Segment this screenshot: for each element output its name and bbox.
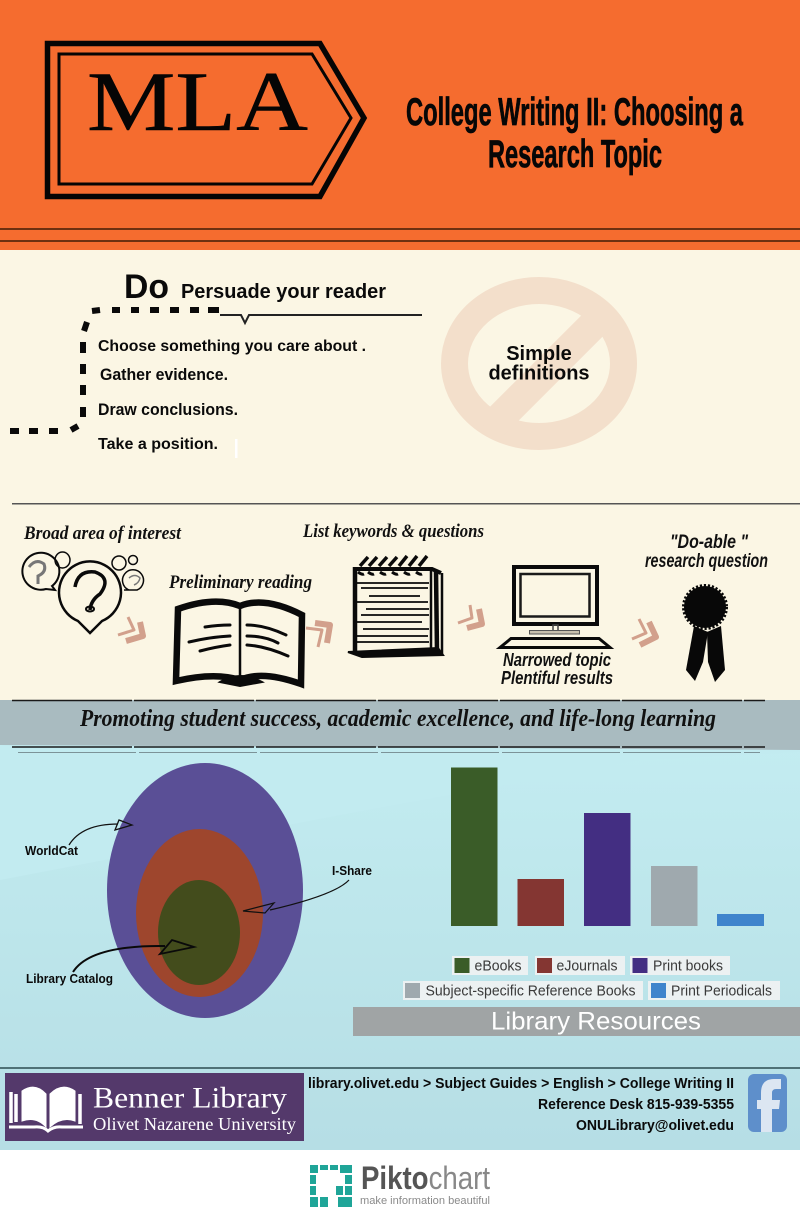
bar: Print books bbox=[584, 813, 630, 926]
icon: chevron 2 bbox=[306, 623, 330, 647]
legend: Print Periodicals bbox=[671, 984, 772, 1000]
text block: contact details: ONULibrary@olivet.edu bbox=[576, 1118, 734, 1134]
I-Share ellipse bbox=[136, 829, 263, 997]
label: do-able research question bbox=[645, 532, 768, 572]
icon: chevron 4 bbox=[632, 619, 656, 645]
icon: question bubbles bbox=[22, 552, 143, 633]
heading: library resources bbox=[353, 1007, 800, 1036]
Library Catalog ellipse bbox=[158, 880, 240, 985]
text block: do list: Choose something you care about . bbox=[98, 338, 366, 355]
text: Olivet Nazarene University: Olivet Nazarene University bbox=[93, 1114, 296, 1134]
banner: mission bbox=[0, 700, 800, 752]
text block: do list: Draw conclusions. bbox=[98, 400, 238, 419]
panel: footer white bbox=[0, 1150, 800, 1223]
icon: computer bbox=[500, 567, 610, 648]
label: do-able research question: "Do-able " bbox=[670, 532, 749, 553]
icon: open book bbox=[176, 602, 302, 686]
heading: library resources: Library Resources bbox=[491, 1008, 701, 1036]
WorldCat ellipse bbox=[107, 763, 303, 1018]
heading: MLA: MLA bbox=[87, 55, 308, 149]
panel: footer contact bbox=[5, 1073, 787, 1141]
arrow: Library Catalog bbox=[73, 940, 194, 972]
text: tagline: make information beautiful bbox=[360, 1195, 490, 1207]
icon: open book logo bbox=[9, 1087, 83, 1131]
legend: Print books bbox=[653, 958, 723, 974]
text: simple definitions: definitions bbox=[488, 362, 590, 384]
text: Benner Library: Benner Library bbox=[93, 1082, 287, 1114]
legend: eJournals bbox=[556, 958, 618, 974]
logo: Piktochart icon bbox=[310, 1165, 352, 1207]
text: simple definitions: Simple bbox=[506, 343, 572, 365]
text block: do list: Gather evidence. bbox=[100, 365, 228, 384]
label: narrowed topic, plentiful results: Plentiful results bbox=[501, 668, 613, 688]
panel: blue background bbox=[0, 745, 800, 1150]
text block: do list bbox=[98, 338, 366, 453]
text block: contact details: library.olivet.edu > Subject Guides > English > College Writing II bbox=[308, 1076, 734, 1092]
text: mission statement: Promoting student success, academic excellence, and life-long learning bbox=[79, 706, 716, 732]
speech line bbox=[220, 315, 422, 323]
legend: Subject-specific Reference Books bbox=[426, 984, 636, 1000]
label: Library Catalog: Library Catalog bbox=[26, 972, 113, 986]
text: Piktochart: Piktochart bbox=[361, 1160, 490, 1196]
title bbox=[406, 91, 743, 176]
heading: Do: Do bbox=[124, 268, 169, 306]
bar chart: library resources bbox=[451, 768, 764, 926]
legend bbox=[403, 956, 780, 1000]
text block: do list: Take a position. bbox=[98, 436, 218, 453]
text block: contact details bbox=[308, 1076, 734, 1134]
text: simple definitions bbox=[488, 343, 590, 384]
label: broad area of interest: Broad area of interest bbox=[23, 523, 182, 544]
legend: eBooks bbox=[474, 958, 522, 974]
label: WorldCat: WorldCat bbox=[25, 844, 79, 858]
bar: eBooks bbox=[451, 768, 498, 926]
icon: award ribbon bbox=[684, 586, 726, 682]
icon: MLA arrow tag bbox=[48, 44, 364, 196]
title: Research Topic bbox=[488, 133, 662, 176]
icon: prohibition sign bbox=[454, 290, 624, 448]
label: preliminary reading: Preliminary reading bbox=[168, 572, 312, 593]
bar: Print Periodicals bbox=[717, 914, 764, 926]
heading: persuade your reader: Persuade your reader bbox=[181, 281, 386, 303]
icon: chevron 1 bbox=[118, 617, 143, 641]
chart: nested ellipses bbox=[25, 763, 372, 1018]
icon: chevron 3 bbox=[458, 605, 482, 628]
arrow: I-Share bbox=[243, 880, 349, 913]
bar: Subject-specific Reference Books bbox=[651, 866, 698, 926]
label: narrowed topic, plentiful results bbox=[501, 650, 613, 688]
label: list keywords and questions: List keywords & questions bbox=[302, 521, 484, 542]
logo: Benner Library bbox=[5, 1073, 304, 1141]
panel: cream background bbox=[0, 250, 800, 700]
panel: do section bbox=[10, 268, 624, 458]
panel: research process bbox=[22, 521, 768, 688]
bar: eJournals bbox=[518, 879, 564, 926]
panel: header bbox=[0, 0, 800, 250]
dashed path bbox=[10, 310, 219, 431]
label: narrowed topic, plentiful results: Narrowed topic bbox=[503, 650, 611, 670]
arrow: WorldCat bbox=[69, 820, 132, 845]
label: I-Share: I-Share bbox=[332, 864, 372, 878]
text block: contact details: Reference Desk 815-939-5355 bbox=[538, 1097, 734, 1113]
icon: notepad bbox=[348, 556, 443, 657]
icon: facebook bbox=[748, 1074, 787, 1132]
